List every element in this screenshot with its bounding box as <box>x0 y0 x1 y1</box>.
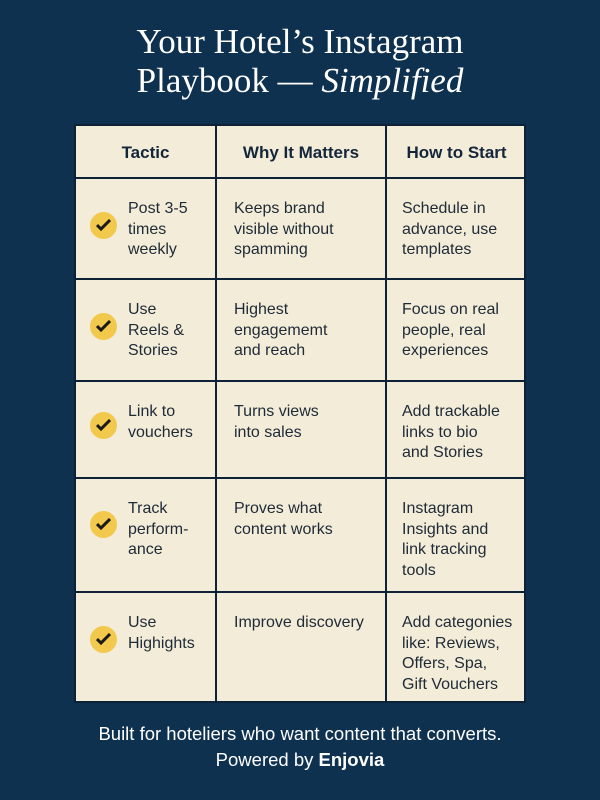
panel: table: spamming <box>234 241 308 258</box>
panel: table: people, real <box>402 322 486 339</box>
panel: table: experiences <box>402 342 488 359</box>
header: how: How to Start <box>406 143 507 162</box>
panel: table: Improve discovery <box>234 614 364 631</box>
row 2: Use <box>128 301 156 318</box>
row 5 <box>128 614 195 652</box>
row 2: Stories <box>128 342 178 359</box>
row 3: vouchers <box>128 424 193 441</box>
panel: table: Instagram <box>402 500 473 517</box>
panel: table: advance, use <box>402 221 497 238</box>
panel: table: Keeps brand <box>234 200 325 217</box>
icon: check 4 <box>90 511 117 538</box>
icon: check 3 <box>90 412 117 439</box>
row 4: ance <box>128 541 163 558</box>
row 4: Track <box>128 500 167 517</box>
row 1 <box>128 200 188 258</box>
footer text: Built for hoteliers who want content that converts. <box>98 723 502 744</box>
panel: table: and reach <box>234 342 305 359</box>
row 1: weekly <box>128 241 177 258</box>
row 3: Link to <box>128 403 175 420</box>
panel: table: visible without <box>234 221 334 238</box>
row 2: Reels & <box>128 322 184 339</box>
panel: table: Highest <box>234 301 288 318</box>
panel: table: Focus on real <box>402 301 499 318</box>
icon: check 2 <box>90 313 117 340</box>
panel: table: Add categonies <box>402 614 512 631</box>
icon: check 5 <box>90 626 117 653</box>
panel: table: into sales <box>234 424 302 441</box>
title: Playbook — Simplified <box>137 61 463 100</box>
row 4: perform- <box>128 521 188 538</box>
panel: table: engagememt <box>234 322 327 339</box>
panel: table: Add trackable <box>402 403 500 420</box>
footer brand: Powered by Enjovia <box>216 749 384 770</box>
row 5: Use <box>128 614 156 631</box>
row 1: times <box>128 221 166 238</box>
icon: check 1 <box>90 212 117 239</box>
panel: table: Insights and <box>402 521 488 538</box>
row 2 <box>128 301 184 359</box>
panel: table: link tracking <box>402 541 486 558</box>
panel: table: Schedule in <box>402 200 486 217</box>
panel: table: Gift Vouchers <box>402 676 498 693</box>
title: Your Hotel’s Instagram <box>136 22 463 61</box>
row 5: Highights <box>128 635 195 652</box>
panel: table: Proves what <box>234 500 322 517</box>
panel: table: tools <box>402 562 436 579</box>
header: tactic: Tactic <box>122 143 169 162</box>
row 3 <box>128 403 193 441</box>
panel: table: Turns views <box>234 403 319 420</box>
panel: table: like: Reviews, <box>402 635 500 652</box>
row 4 <box>128 500 188 558</box>
row 1: Post 3-5 <box>128 200 188 217</box>
title <box>136 22 464 100</box>
panel: table: links to bio <box>402 424 478 441</box>
panel: table: content works <box>234 521 333 538</box>
panel: table: templates <box>402 241 471 258</box>
panel: table: Offers, Spa, <box>402 655 487 672</box>
header: why: Why It Matters <box>243 143 359 162</box>
panel: table: and Stories <box>402 444 483 461</box>
panel: table <box>74 124 526 703</box>
